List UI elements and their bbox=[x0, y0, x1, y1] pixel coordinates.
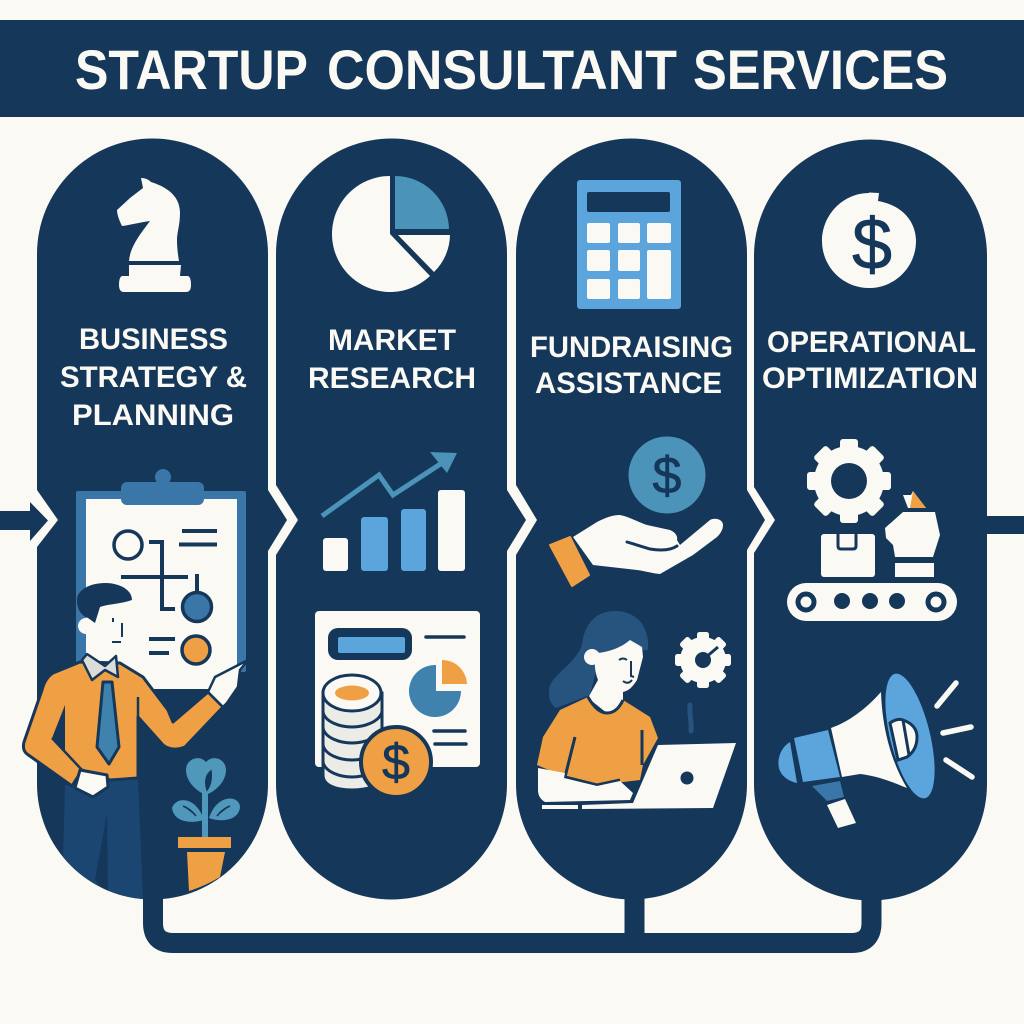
icon: pie chart bbox=[332, 176, 450, 292]
heading: business strategy and planning: STRATEGY & bbox=[60, 361, 247, 394]
heading: fundraising assistance: ASSISTANCE bbox=[535, 367, 722, 400]
icon: dollar circle bbox=[822, 192, 916, 288]
arrow: entry from left bbox=[0, 502, 48, 541]
heading: market research: MARKET bbox=[328, 324, 456, 357]
figure: consultant presenting bbox=[23, 583, 248, 899]
icon: potted plant bbox=[172, 758, 240, 891]
heading: operational optimization bbox=[762, 326, 978, 395]
heading: business strategy and planning bbox=[60, 323, 247, 432]
heading: business strategy and planning: PLANNING bbox=[72, 399, 234, 432]
title: STARTUP bbox=[75, 38, 308, 101]
title bbox=[75, 38, 948, 101]
heading: market research bbox=[308, 324, 476, 395]
title: SERVICES bbox=[693, 38, 948, 101]
icon: dollar coin bbox=[361, 727, 431, 797]
steam wisp bbox=[690, 705, 691, 731]
connector: right exit bbox=[985, 516, 1024, 534]
icon: calculator bbox=[577, 180, 681, 309]
icon: dollar coin above hand: $ bbox=[653, 447, 682, 505]
heading: fundraising assistance: FUNDRAISING bbox=[530, 331, 733, 364]
title: CONSULTANT bbox=[327, 38, 677, 101]
heading: business strategy and planning: BUSINESS bbox=[79, 323, 228, 356]
panel: fundraising assistance bbox=[516, 138, 765, 899]
heading: market research: RESEARCH bbox=[308, 362, 476, 395]
icon: dollar coin above hand bbox=[628, 436, 706, 514]
panel: market research bbox=[276, 138, 526, 899]
icon: coin stack bbox=[323, 675, 382, 790]
chart: growth bars with trend arrow bbox=[322, 452, 465, 571]
clipboard with flow diagram bbox=[76, 469, 246, 689]
title banner bbox=[0, 20, 1024, 117]
heading: operational optimization: OPTIMIZATION bbox=[762, 362, 978, 395]
heading: fundraising assistance bbox=[530, 331, 733, 400]
icon: open hand bbox=[550, 515, 723, 586]
icon: dollar coin: $ bbox=[382, 734, 410, 790]
icon: chess knight bbox=[117, 178, 191, 292]
panel: operational optimization bbox=[754, 140, 987, 900]
icon: small gear bbox=[675, 632, 731, 688]
panel: business strategy and planning bbox=[23, 138, 287, 899]
figure: woman at laptop bbox=[537, 611, 736, 809]
report card bbox=[315, 611, 480, 767]
icon: megaphone bbox=[778, 669, 972, 828]
icon: conveyor with box and robot arm bbox=[787, 491, 957, 621]
icon: dollar circle: $ bbox=[852, 205, 892, 285]
heading: operational optimization: OPERATIONAL bbox=[767, 326, 976, 359]
connector: bottom bracket bbox=[153, 890, 872, 943]
icon: large gear bbox=[807, 439, 891, 523]
